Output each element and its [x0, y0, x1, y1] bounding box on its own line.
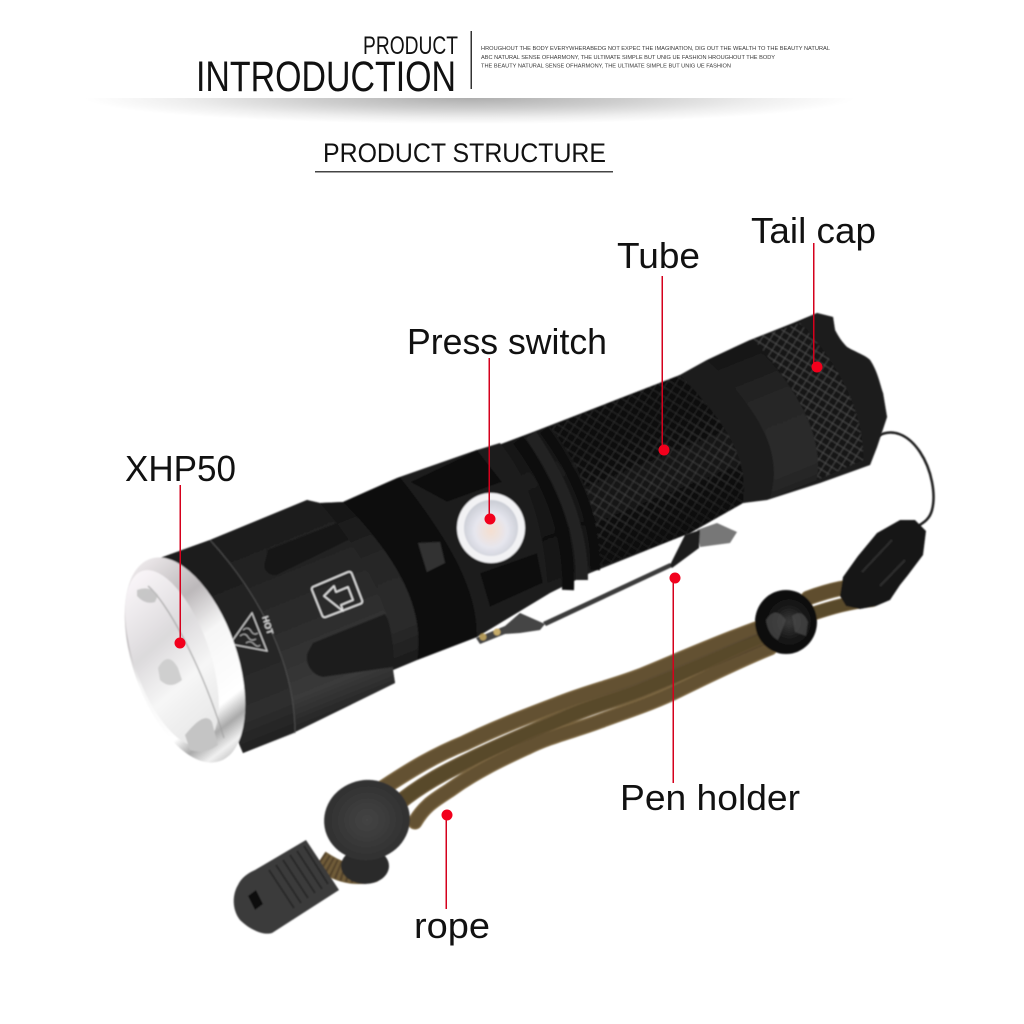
head section [160, 500, 395, 753]
lower bead [318, 773, 416, 884]
arrow icon [312, 572, 362, 617]
header small description text: THE BEAUTY NATURAL SENSE OFHARMONY, THE ULTIMATE SIMPLE BUT UNIG UE FASHION [481, 64, 731, 70]
header divider line [470, 31, 472, 89]
header small description text [481, 46, 830, 70]
head front ring [160, 540, 295, 753]
lens reflector face [106, 559, 238, 757]
bottom clip [234, 840, 339, 934]
callout: Press switch: Press switch [407, 321, 607, 362]
section heading: product structure: PRODUCT STRUCTURE [323, 138, 606, 168]
HOT warning icon: HOT [260, 615, 275, 636]
press switch button [457, 493, 525, 563]
callout: rope: rope [414, 905, 490, 946]
upper head groove [264, 522, 355, 575]
pen clip [476, 523, 737, 644]
knurled tail cap [753, 323, 863, 480]
callout: Tail cap [751, 210, 876, 372]
callout: rope [414, 810, 490, 946]
header small description text: HROUGHOUT THE BODY EVERYWHERABEDG NOT EXPEC THE IMAGINATION, DIG OUT THE WEALTH TO THE BEAUTY NATURAL [481, 46, 830, 52]
knurled tube [550, 375, 744, 567]
switch collar [400, 443, 548, 637]
lanyard rope with beads and clips [234, 433, 933, 934]
callout: Pen holder [620, 572, 800, 818]
hex facet highlight [418, 542, 445, 572]
header shadow band [85, 98, 855, 124]
silver bezel [101, 542, 269, 778]
tube end ring [680, 360, 774, 503]
flashlight [101, 313, 887, 778]
callout: Press switch [407, 321, 607, 524]
recess on switch collar bottom [480, 553, 543, 607]
collar ring bands [518, 430, 595, 590]
callout: Pen holder: Pen holder [620, 777, 800, 818]
crenellated tail end [800, 313, 887, 465]
top buckle [840, 520, 926, 609]
header: product introduction [196, 31, 830, 101]
flashlight body silhouette [160, 313, 887, 753]
callout: Tube [617, 235, 700, 456]
recess on switch collar top [410, 450, 502, 502]
wire loop [878, 433, 934, 526]
header small description text: ABC NATURAL SENSE OFHARMONY, THE ULTIMATE SIMPLE BUT UNIG UE FASHION HROUGHOUT THE BODY [481, 55, 775, 61]
lower head groove [307, 614, 394, 677]
heading: PRODUCT: PRODUCT [363, 32, 458, 60]
callout: XHP50 [125, 448, 236, 648]
upper bead [755, 590, 817, 654]
callout: Tail cap: Tail cap [751, 210, 876, 251]
callout: XHP50: XHP50 [125, 448, 236, 489]
neck ring [320, 502, 418, 670]
rope strands [320, 586, 872, 874]
HOT warning icon [230, 613, 275, 651]
heading: INTRODUCTION: INTRODUCTION [196, 53, 456, 101]
callout: Tube: Tube [617, 235, 700, 276]
reflector cups [137, 588, 158, 603]
